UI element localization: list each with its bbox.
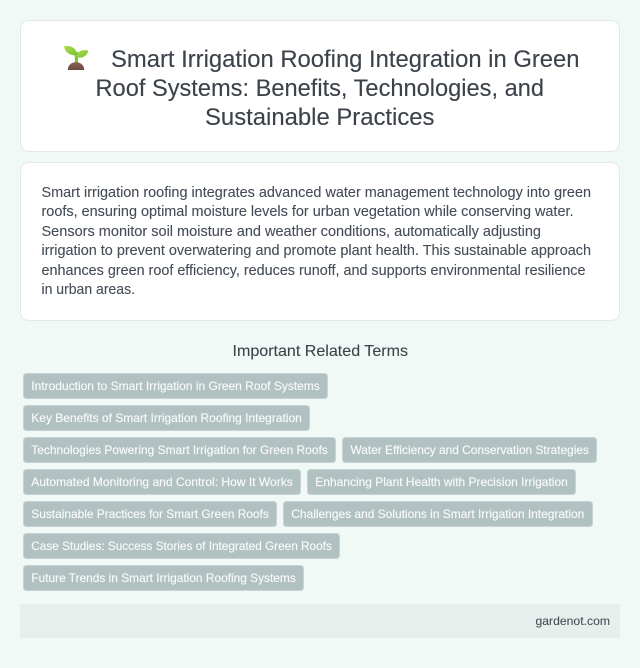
tag: plant health [308, 470, 576, 494]
tag: sustainable practices: Sustainable Practices for Smart Green Roofs [31, 507, 269, 521]
description text: roofs, ensuring optimal moisture levels for urban vegetation while conserving water. [42, 204, 574, 220]
description text: enhances green roof efficiency, reduces runoff, and supports environmental resilience [42, 263, 586, 279]
tag: automated monitoring: Automated Monitoring and Control: How It Works [31, 475, 293, 489]
tag: future trends: Future Trends in Smart Irrigation Roofing Systems [31, 571, 296, 585]
tag: key benefits [24, 406, 310, 430]
tag: sustainable practices [24, 502, 276, 526]
description text: irrigation to prevent overwatering and promote plant health. This sustainable approach [42, 243, 591, 259]
description text [42, 185, 591, 298]
tag: technologies [24, 438, 336, 462]
tag: key benefits: Key Benefits of Smart Irrigation Roofing Integration [31, 411, 302, 425]
tag: plant health: Enhancing Plant Health with Precision Irrigation [315, 475, 568, 489]
title text [96, 46, 580, 131]
related terms list [24, 374, 596, 590]
footer [20, 604, 620, 638]
tag: technologies: Technologies Powering Smart Irrigation for Green Roofs [31, 443, 328, 457]
tag: automated monitoring [24, 470, 300, 494]
section heading: Important Related Terms [232, 343, 408, 360]
description text: Sensors monitor soil moisture and weather conditions, automatically adjusting [42, 224, 541, 240]
description panel [20, 162, 620, 320]
tag: challenges: Challenges and Solutions in Smart Irrigation Integration [291, 507, 584, 521]
tag: water efficiency [342, 438, 596, 462]
title text: Roof Systems: Benefits, Technologies, and [96, 75, 544, 102]
tag: future trends [24, 566, 304, 590]
tag: water efficiency: Water Efficiency and Conservation Strategies [350, 443, 589, 457]
tag: case studies: Case Studies: Success Stories of Integrated Green Roofs [31, 539, 332, 553]
tag: challenges [284, 502, 592, 526]
title panel [20, 20, 620, 152]
tag: case studies [24, 534, 340, 558]
title text: Sustainable Practices [205, 104, 434, 131]
tag: introduction: Introduction to Smart Irrigation in Green Roof Systems [31, 379, 320, 393]
footer source text: gardenot.com [536, 614, 610, 628]
tag: introduction [24, 374, 328, 398]
icon: seedling [64, 46, 88, 70]
title text: Smart Irrigation Roofing Integration in Green [111, 46, 580, 73]
description text: Smart irrigation roofing integrates advanced water management technology into green [42, 185, 591, 201]
description text: in urban areas. [42, 282, 135, 298]
